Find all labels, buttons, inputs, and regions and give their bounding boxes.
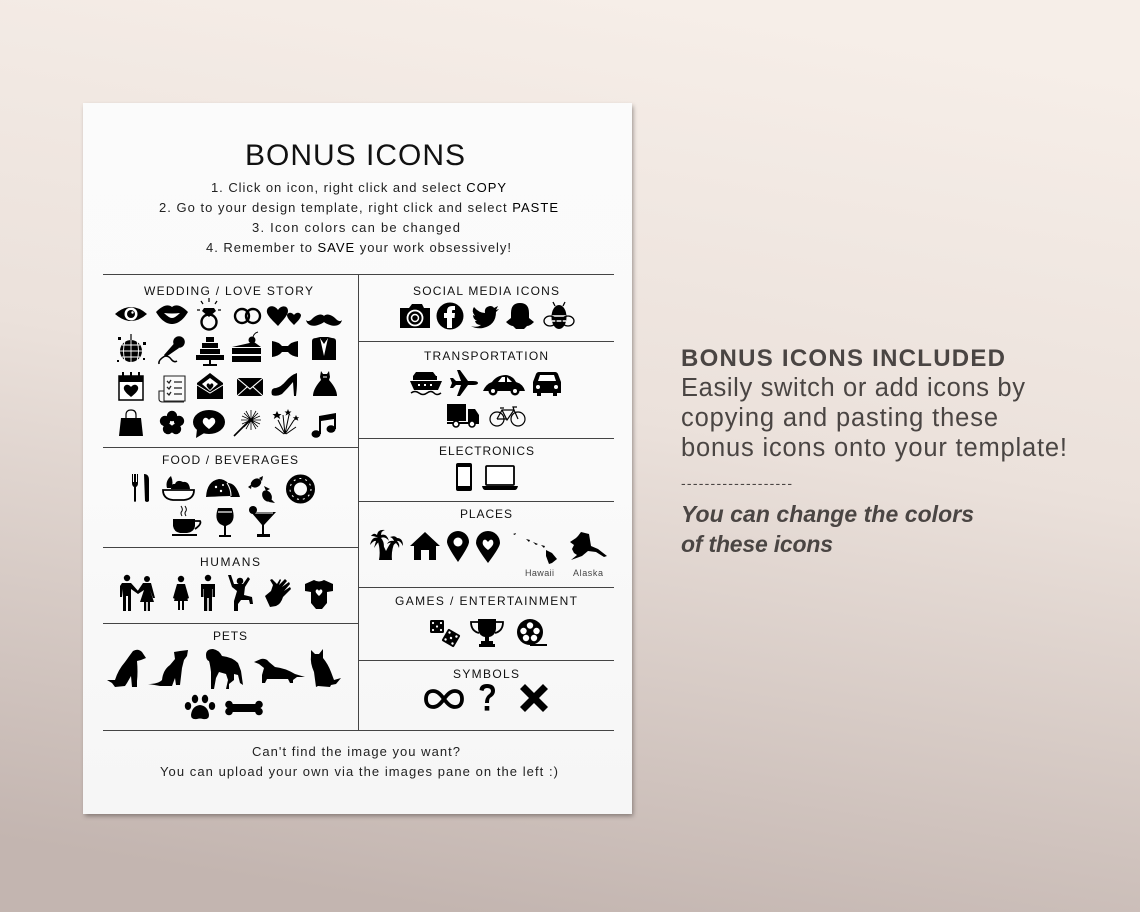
icon: x mark — [520, 684, 548, 712]
section: humans — [120, 555, 333, 611]
instructions — [159, 180, 558, 255]
heading: pets: PETS — [213, 629, 247, 643]
icon: hand — [265, 579, 291, 607]
description: bonus icons onto your template! — [681, 434, 1067, 462]
icon: car front — [533, 372, 561, 396]
title: BONUS ICONS — [245, 139, 465, 172]
icon: salad bowl — [163, 476, 194, 500]
italic note: You can change the colors — [681, 501, 974, 527]
italic note — [681, 501, 974, 557]
icon: wedding cake — [196, 337, 224, 366]
icon: open envelope — [197, 373, 223, 399]
icon: moustache — [306, 315, 342, 326]
section: electronics — [439, 444, 534, 491]
section: wedding / love story — [115, 284, 342, 438]
icon: calendar — [119, 372, 143, 400]
icon: smartphone — [456, 463, 472, 491]
icon: bow tie — [272, 341, 298, 357]
footer text: You can upload your own via the images pane on the left :) — [160, 764, 558, 779]
icon: paw — [185, 695, 215, 719]
italic note: of these icons — [681, 531, 833, 557]
icon: lips — [156, 305, 188, 324]
panel: bonus icons sheet — [83, 103, 632, 814]
dashed separator: ------------------- — [681, 475, 792, 491]
section: social media icons — [400, 284, 574, 330]
map: hawaii — [513, 533, 557, 578]
section: places — [370, 507, 607, 578]
icon: taco — [206, 479, 240, 497]
instructions: 3. Icon colors can be changed — [252, 220, 460, 235]
icon: hearts — [267, 306, 301, 326]
icon: woman — [173, 576, 189, 610]
icon: man — [201, 575, 215, 611]
heading: symbols: SYMBOLS — [453, 667, 519, 681]
section: games / entertainment — [395, 594, 578, 648]
icon: high heel — [272, 373, 297, 396]
icon: cat — [311, 649, 341, 687]
icon: house — [410, 532, 440, 560]
instructions: 1. Click on icon, right click and select COPY — [211, 180, 506, 195]
section: transportation — [410, 349, 561, 427]
heading: games: GAMES / ENTERTAINMENT — [395, 594, 578, 608]
footer text: Can't find the image you want? — [252, 744, 460, 759]
icon: flower — [160, 411, 184, 434]
icon: wine glass — [216, 508, 234, 537]
heading: humans: HUMANS — [200, 555, 260, 569]
icon: facebook — [436, 302, 464, 330]
icon: dachshund — [254, 659, 305, 683]
icon: envelope — [237, 378, 263, 396]
icon: airplane — [450, 370, 478, 396]
section: pets — [107, 629, 341, 719]
section: symbols — [426, 667, 548, 712]
icon: sitting dog — [107, 650, 146, 687]
icon: heart map pin — [476, 531, 500, 563]
icon: delivery truck — [447, 404, 479, 427]
footer text — [160, 744, 558, 779]
icon: bumble bee — [544, 302, 574, 329]
icon: dice — [430, 620, 461, 648]
heading: bonus icons included: BONUS ICONS INCLUDED — [681, 345, 1005, 372]
icon: trophy — [471, 619, 503, 647]
icon: snapchat ghost — [506, 303, 534, 329]
heading: places: PLACES — [460, 507, 512, 521]
map: alaska — [570, 532, 607, 578]
instructions: 2. Go to your design template, right click and select PASTE — [159, 200, 558, 215]
icon: film reel — [517, 619, 547, 646]
icon: baby onesie — [305, 580, 333, 609]
label: alaska: Alaska — [573, 568, 603, 578]
label: hawaii: Hawaii — [525, 568, 554, 578]
icon: twitter — [471, 306, 499, 328]
icon: laptop — [482, 466, 518, 490]
text block: bonus icons included — [681, 345, 1067, 557]
paper shadow — [85, 106, 633, 816]
heading: transportation: TRANSPORTATION — [424, 349, 548, 363]
icon: donut — [290, 478, 311, 500]
icon: standing mastiff — [206, 649, 243, 689]
icon: diamond ring — [197, 298, 221, 330]
icon: bone — [225, 701, 263, 715]
icon: eye — [115, 307, 147, 321]
description — [681, 374, 1067, 462]
section: food / beverages — [132, 453, 311, 537]
icon: fireworks — [272, 409, 299, 434]
heading: wedding: WEDDING / LOVE STORY — [144, 284, 313, 298]
icon: microphone — [159, 336, 185, 364]
icon: couple — [120, 575, 155, 611]
icon: wedding rings — [235, 309, 260, 323]
icon: dancing person — [228, 575, 253, 611]
icon: cruise ship — [410, 372, 442, 394]
icon: fork and knife — [132, 474, 149, 502]
icon: disco ball — [117, 334, 146, 362]
icon: infinity — [426, 691, 462, 707]
icon: candy — [248, 476, 275, 503]
icon: question mark — [480, 684, 495, 711]
icon: music notes — [312, 413, 336, 438]
icon: coffee cup — [172, 506, 200, 536]
icon: cake slice — [232, 332, 261, 362]
heading: electronics: ELECTRONICS — [439, 444, 534, 458]
icon: map pin — [447, 531, 469, 562]
icon: heart speech bubble — [193, 410, 225, 438]
icon: tuxedo — [312, 337, 336, 360]
heading: food: FOOD / BEVERAGES — [162, 453, 298, 467]
heading: social: SOCIAL MEDIA ICONS — [413, 284, 559, 298]
description: Easily switch or add icons by — [681, 374, 1025, 402]
icon: sitting terrier — [148, 650, 188, 686]
icon: dress — [313, 371, 337, 396]
icon: bicycle — [490, 407, 525, 426]
icon: martini glass — [249, 506, 276, 537]
description: copying and pasting these — [681, 404, 998, 432]
icon: beetle car — [483, 375, 525, 396]
instructions: 4. Remember to SAVE your work obsessively! — [206, 240, 511, 255]
icon: sparkler — [234, 410, 261, 436]
icon: camera — [400, 304, 430, 328]
icon: checklist — [159, 376, 185, 402]
icon: shopping bag — [119, 410, 143, 436]
icon: palm trees — [370, 530, 403, 560]
